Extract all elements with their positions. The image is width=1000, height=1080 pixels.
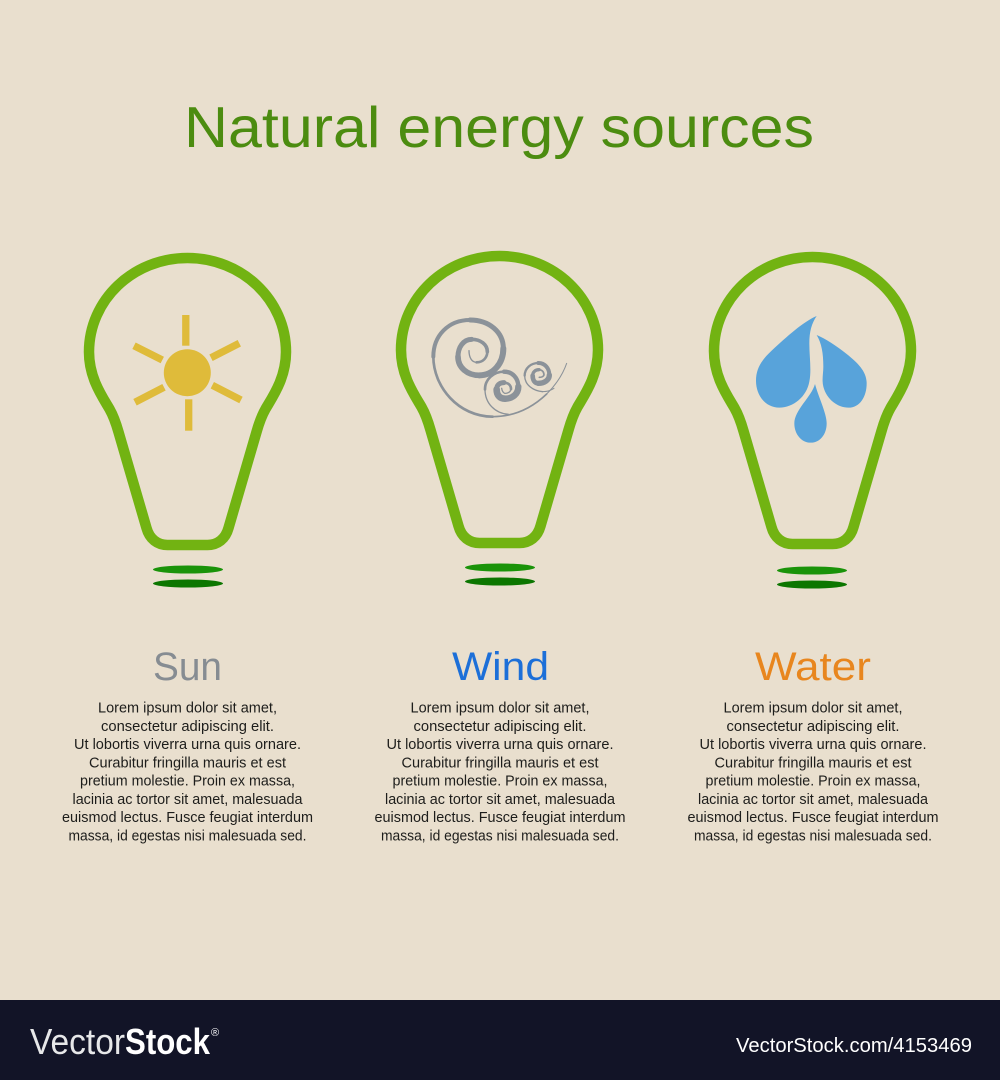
footer logo: Stock (125, 1021, 211, 1062)
text block: water description: consectetur adipiscing elit. (726, 719, 900, 735)
text block: water description: euismod lectus. Fusce feugiat interdum (688, 810, 938, 826)
icon: sun (134, 315, 241, 431)
text block: sun description: Ut lobortis viverra urna quis ornare. (74, 737, 301, 753)
text block: water description: Lorem ipsum dolor sit amet, (724, 700, 902, 716)
text block: sun description: pretium molestie. Proin ex massa, (80, 774, 295, 790)
icon: wind light bulb outline (401, 256, 598, 543)
icon: water drops (756, 316, 867, 443)
footer logo (30, 1021, 219, 1062)
icon: water light bulb outline (714, 257, 911, 544)
text block: wind description: pretium molestie. Proin ex massa, (392, 774, 608, 790)
icon: wind bulb base (465, 564, 535, 586)
icon: water bulb base (777, 566, 847, 588)
panel: water (688, 257, 938, 844)
text block: water description (688, 700, 938, 844)
text block: sun description: Lorem ipsum dolor sit amet, (98, 700, 277, 716)
footer logo: ® (211, 1027, 219, 1039)
text block: sun description (62, 700, 313, 844)
heading: Wind: Wind (452, 645, 549, 689)
text block: wind description: Lorem ipsum dolor sit amet, (410, 700, 590, 716)
text block: wind description: Ut lobortis viverra urna quis ornare. (386, 737, 614, 753)
footer bar (0, 1000, 1000, 1080)
text block: sun description: massa, id egestas nisi malesuada sed. (68, 828, 306, 844)
title: Natural energy sources (184, 96, 814, 160)
text block: water description: lacinia ac tortor sit amet, malesuada (698, 792, 929, 808)
text block: sun description: consectetur adipiscing elit. (101, 719, 274, 735)
text block: wind description (374, 700, 626, 844)
icon: sun light bulb outline (89, 258, 286, 545)
text block: water description: massa, id egestas nisi malesuada sed. (694, 828, 932, 844)
text block: sun description: euismod lectus. Fusce feugiat interdum (62, 810, 313, 826)
text block: wind description: Curabitur fringilla mauris et est (402, 756, 598, 772)
text block: wind description: consectetur adipiscing elit. (414, 719, 586, 735)
text block: sun description: Curabitur fringilla mauris et est (89, 756, 286, 772)
footer image id: VectorStock.com/4153469 (736, 1034, 972, 1057)
text block: sun description: lacinia ac tortor sit amet, malesuada (72, 792, 303, 808)
text block: wind description: lacinia ac tortor sit amet, malesuada (385, 792, 616, 808)
text block: wind description: massa, id egestas nisi malesuada sed. (381, 828, 619, 844)
text block: water description: Ut lobortis viverra urna quis ornare. (700, 737, 926, 753)
text block: water description: pretium molestie. Proin ex massa, (706, 774, 920, 790)
heading: Water: Water (755, 645, 871, 689)
text block: wind description: euismod lectus. Fusce feugiat interdum (374, 810, 626, 826)
text block: water description: Curabitur fringilla mauris et est (714, 756, 912, 772)
icon: sun bulb base (153, 566, 223, 588)
panel: wind (374, 256, 626, 844)
panel: sun (62, 258, 313, 844)
icon: wind spirals (433, 320, 567, 417)
footer logo: Vector (30, 1021, 125, 1062)
heading: Sun: Sun (153, 645, 222, 689)
